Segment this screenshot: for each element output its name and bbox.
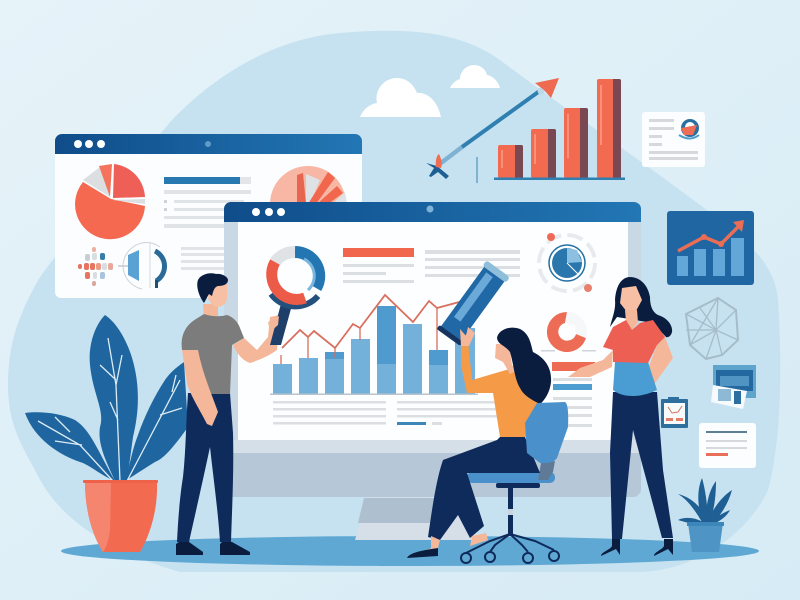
monitor stand xyxy=(355,497,478,540)
plant: large pot plant xyxy=(25,315,188,552)
card: document with badge xyxy=(642,112,705,167)
icon: small monitor and card xyxy=(711,365,756,409)
chair back xyxy=(525,402,568,463)
panel: trend chart xyxy=(667,211,754,285)
card: note xyxy=(699,423,756,468)
monitor: main dashboard xyxy=(224,202,641,497)
icon: polyhedron xyxy=(686,298,738,359)
icon: clipboard xyxy=(661,397,688,428)
window: back dashboard xyxy=(55,134,362,298)
chart: second pie xyxy=(270,166,347,204)
bar chart xyxy=(270,295,478,395)
chart: gear dial xyxy=(539,233,595,292)
bar chart: red bars xyxy=(494,79,625,180)
person: standing woman xyxy=(568,277,673,556)
ground shadow xyxy=(61,536,759,566)
chart: small donut xyxy=(541,312,596,352)
trousers xyxy=(428,437,540,540)
chair seat and base xyxy=(461,461,559,563)
pot xyxy=(83,480,158,552)
icon: magnifier donut xyxy=(270,252,319,345)
plant: small pot plant xyxy=(678,478,732,552)
person: man with magnifier xyxy=(176,273,280,555)
heading bar and text xyxy=(343,248,520,283)
tube xyxy=(437,260,510,346)
arm and torso xyxy=(461,342,538,437)
text lines under chart xyxy=(273,401,497,425)
arrow: rocket trajectory xyxy=(426,78,559,183)
chart: dot cluster xyxy=(78,247,113,286)
text block with bars xyxy=(552,362,595,427)
text block xyxy=(164,177,251,228)
person: seated woman with tube xyxy=(407,260,568,563)
chart: gauge xyxy=(118,242,165,289)
text lines xyxy=(181,247,231,270)
clouds xyxy=(360,65,500,117)
leaves xyxy=(25,315,188,481)
chart: large pie xyxy=(75,164,145,239)
hand on magnifier xyxy=(268,316,279,332)
